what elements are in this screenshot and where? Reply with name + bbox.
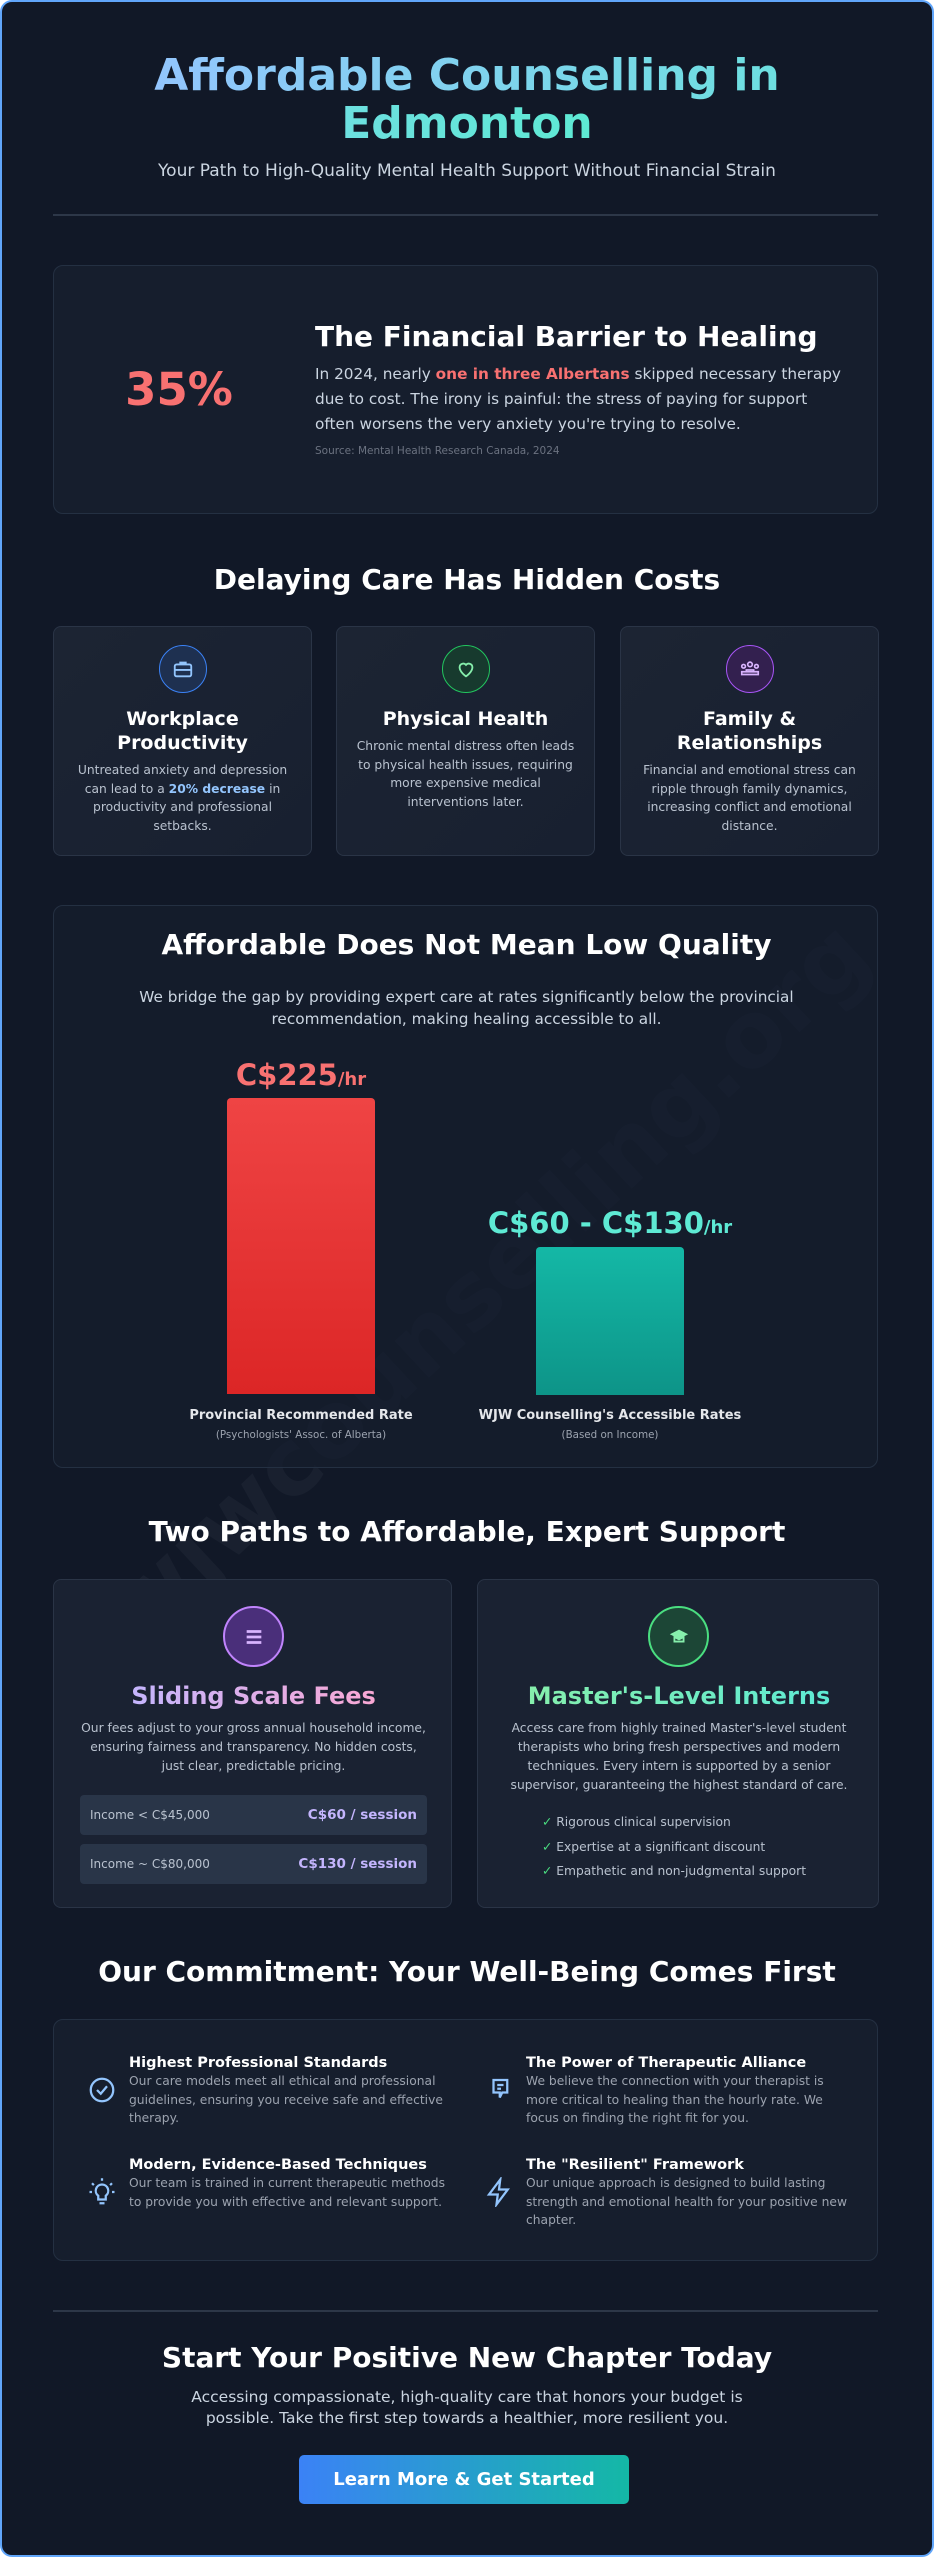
title: Chronic mental distress often leads to physical health issues, requiring more expensive medical interventions later. — [357, 739, 574, 808]
card: sliding scale — [53, 1579, 452, 1908]
title: Edmonton — [341, 98, 593, 149]
checklist: ✓ Empathetic and non-judgmental support — [542, 1864, 806, 1878]
item: alliance: We believe the connection with your therapist is more critical to healing than the hourly rate. We focus on finding the right fit for you. — [526, 2074, 824, 2125]
panel: financial barrier stat — [53, 265, 878, 514]
text: just clear, predictable pricing. — [162, 1759, 345, 1773]
item: standards: Highest Professional Standards — [129, 2055, 387, 2071]
bar: provincial — [189, 1058, 413, 1441]
title: Financial and emotional stress can ripple through family dynamics, increasing conflict and emotional distance. — [643, 763, 856, 832]
bar: provincial: Provincial Recommended Rate — [189, 1408, 413, 1423]
title: Family & — [703, 708, 796, 730]
text: therapists who bring fresh perspectives and modern — [518, 1740, 840, 1754]
text: barrier paragraph: In 2024, nearly one in three Albertans skipped necessary therapy — [315, 365, 841, 383]
text — [511, 1721, 847, 1792]
bar: provincial: C$225/hr — [236, 1058, 366, 1092]
row: income 80k: Income ~ C$80,000 — [90, 1857, 210, 1871]
heading: financial barrier: The Financial Barrier to Healing — [315, 320, 818, 353]
title: Relationships — [677, 732, 822, 754]
text — [81, 1721, 426, 1773]
text: CTA — [191, 2388, 743, 2427]
icon: list — [223, 1606, 284, 1667]
source: Source: Mental Health Research Canada, 2024 — [315, 445, 560, 457]
heading: Affordable Does Not Mean Low Quality — [162, 928, 771, 961]
text: bridge the gap: We bridge the gap by providing expert care at rates significantly below the provincial — [139, 988, 794, 1006]
heading: delaying care: Delaying Care Has Hidden Costs — [214, 563, 720, 596]
panel: price comparison chart — [53, 905, 878, 1468]
button: Learn More & Get Started — [333, 2469, 595, 2490]
title — [78, 708, 287, 832]
text: barrier paragraph — [315, 365, 841, 433]
icon: heart — [442, 645, 490, 693]
title: Affordable Counselling in — [154, 50, 780, 101]
item: techniques: Modern, Evidence-Based Techniques — [129, 2157, 427, 2173]
item: techniques: Our team is trained in current therapeutic methods to provide you with effective and relevant support. — [129, 2176, 445, 2208]
card: family relationships — [620, 626, 879, 856]
bar: provincial: (Psychologists' Assoc. of Alberta) — [216, 1429, 386, 1441]
item: techniques — [129, 2157, 445, 2208]
subtitle: Your Path to High-Quality Mental Health Support Without Financial Strain — [158, 161, 776, 181]
title — [154, 50, 780, 149]
title: Untreated anxiety and depression can lead to a 20% decrease in productivity and professional setbacks. — [78, 763, 287, 832]
text: techniques. Every intern is supported by a senior — [528, 1759, 830, 1773]
text: barrier paragraph: often worsens the very anxiety you're trying to resolve. — [315, 415, 741, 433]
bar: WJW rates — [479, 1206, 741, 1441]
text: CTA: Accessing compassionate, high-quality care that honors your budget is — [191, 2388, 743, 2406]
icon: lightbulb — [90, 2178, 114, 2204]
title — [357, 708, 574, 808]
item: alliance: The Power of Therapeutic Alliance — [526, 2055, 806, 2071]
checklist: ✓ Expertise at a significant discount — [542, 1840, 765, 1854]
text: Access care from highly trained Master's-level student — [512, 1721, 846, 1735]
item: resilient: Our unique approach is designed to build lasting strength and emotional health for your positive new chapter. — [526, 2176, 847, 2227]
stat: 35%: 35% — [125, 363, 233, 416]
icon: bolt — [486, 2177, 510, 2207]
item: standards: Our care models meet all ethical and professional guidelines, ensuring you receive safe and effective therapy. — [129, 2074, 443, 2125]
heading: commitment: Our Commitment: Your Well-Being Comes First — [98, 1955, 836, 1988]
title — [643, 708, 856, 832]
text: bridge the gap — [139, 988, 794, 1028]
icon: chat — [492, 2078, 508, 2098]
text: Our fees adjust to your gross annual household income, — [81, 1721, 426, 1735]
text: CTA: possible. Take the first step towards a healthier, more resilient you. — [206, 2409, 728, 2427]
watermark: wjwcounselling.org — [84, 899, 890, 1662]
title: Physical Health — [383, 708, 548, 730]
panel: commitments — [53, 2019, 878, 2261]
icon: briefcase — [159, 645, 207, 693]
text: supervisor, guaranteeing the highest standard of care. — [511, 1778, 847, 1792]
title: Master's-Level Interns — [528, 1682, 830, 1710]
button — [299, 2455, 629, 2504]
bar: WJW rates: (Based on Income) — [562, 1429, 658, 1441]
card: workplace productivity — [53, 626, 312, 856]
heading: two paths: Two Paths to Affordable, Expert Support — [149, 1515, 785, 1548]
checklist: ✓ Rigorous clinical supervision — [542, 1815, 731, 1829]
item: resilient: The "Resilient" Framework — [526, 2157, 744, 2173]
checklist — [542, 1815, 806, 1878]
text: ensuring fairness and transparency. No hidden costs, — [90, 1740, 417, 1754]
icon: check circle — [90, 2078, 114, 2102]
row: income 45k — [80, 1795, 427, 1835]
title: Productivity — [117, 732, 248, 754]
row: income 45k: C$60 / session — [308, 1807, 417, 1823]
title: Sliding Scale Fees — [131, 1682, 376, 1710]
card: interns — [477, 1579, 879, 1908]
row: income 45k: Income < C$45,000 — [90, 1808, 210, 1822]
text: bridge the gap: recommendation, making healing accessible to all. — [271, 1010, 662, 1028]
row: income 80k — [80, 1844, 427, 1884]
icon: people — [726, 645, 774, 693]
row: income 80k: C$130 / session — [298, 1856, 417, 1872]
card: physical health — [336, 626, 595, 856]
bar: WJW rates: C$60 - C$130/hr — [488, 1206, 732, 1240]
text: barrier paragraph: due to cost. The irony is painful: the stress of paying for support — [315, 390, 807, 408]
heading: CTA: Start Your Positive New Chapter Today — [162, 2341, 772, 2374]
title: Workplace — [126, 708, 239, 730]
bar: WJW rates: WJW Counselling's Accessible Rates — [479, 1408, 741, 1423]
icon: graduation cap — [648, 1606, 709, 1667]
